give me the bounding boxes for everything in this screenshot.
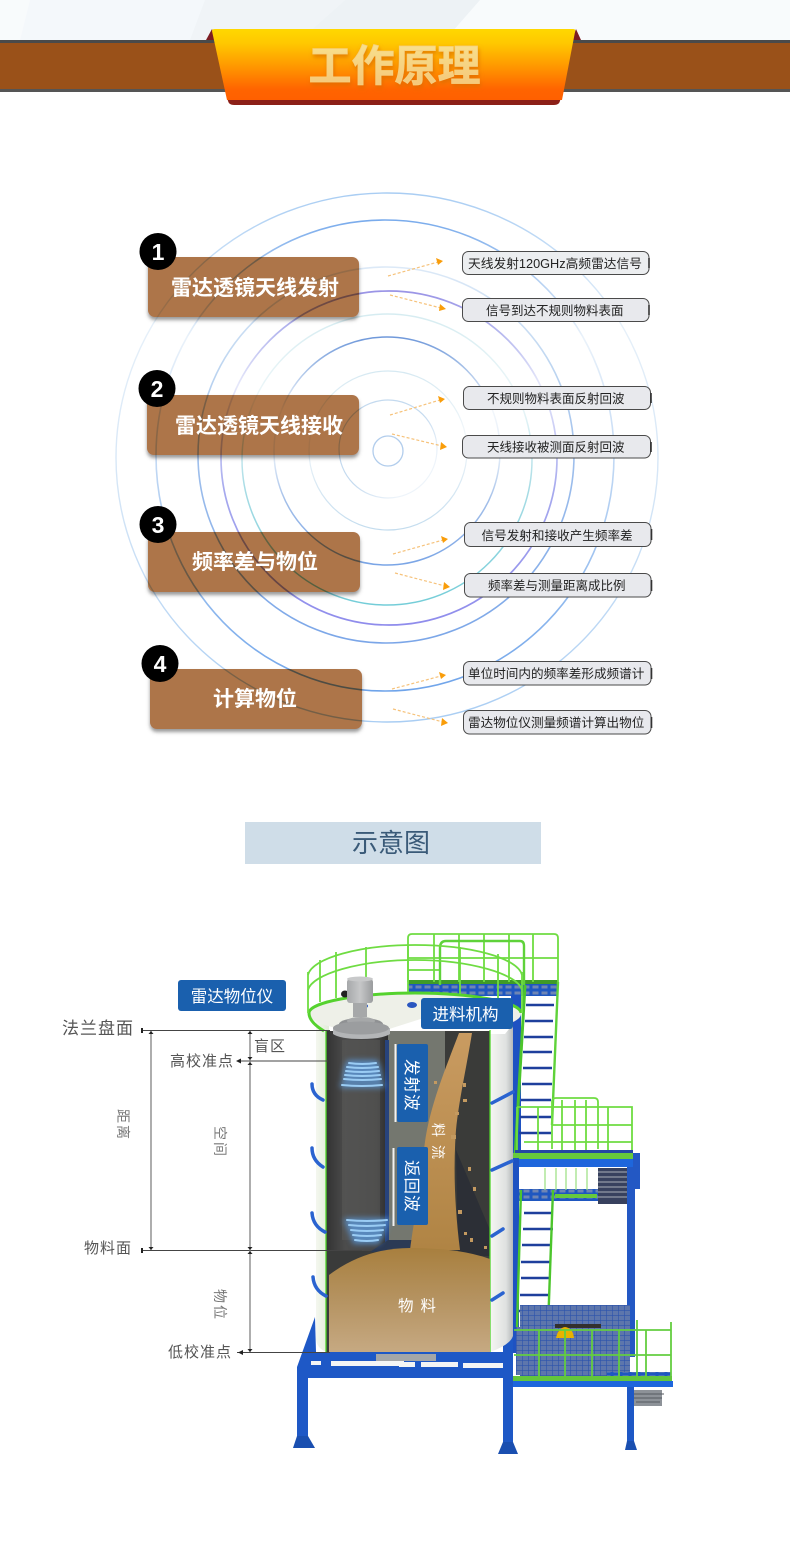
label: transmit wave — [394, 1044, 428, 1122]
label: feed mechanism — [421, 998, 513, 1029]
lower stair — [517, 1190, 553, 1327]
icon: radar level gauge — [333, 976, 390, 1039]
step 4: calculate level — [142, 645, 652, 734]
note 2b — [462, 436, 651, 458]
label: blind zone: 盲区 — [254, 1038, 286, 1055]
note 3a: 信号发射和接收产生频率差 — [482, 528, 633, 543]
middle platform — [513, 1098, 640, 1357]
note 1b — [462, 298, 649, 322]
title badge — [206, 29, 581, 105]
label: distance: 距离 — [115, 1109, 131, 1141]
note 2a — [464, 386, 651, 410]
material pile — [329, 1248, 490, 1352]
support legs — [293, 1140, 637, 1454]
note 3b: 频率差与测量距离成比例 — [488, 578, 626, 593]
arrow 2a — [390, 396, 445, 415]
icon: return wave bottom — [347, 1220, 387, 1241]
base slots — [311, 1361, 503, 1368]
tank cutaway interior — [326, 1030, 490, 1352]
arrow 3a — [393, 536, 448, 554]
number badge 2: 2 — [151, 376, 163, 402]
label: feed mechanism: 进料机构 — [432, 1005, 498, 1024]
silo steel structure — [293, 934, 673, 1454]
tank lid and ring rail — [308, 945, 522, 1035]
note 4b: 雷达物位仪测量频谱计算出物位 — [468, 716, 645, 730]
label: material flow: 料流 — [430, 1123, 446, 1167]
number badge 4: 4 — [154, 651, 167, 677]
schematic heading: 示意图 — [352, 828, 430, 858]
label: return wave: 返回波 — [402, 1160, 421, 1212]
note 3a — [464, 522, 652, 546]
step 4 heading: 计算物位 — [213, 687, 297, 711]
note 2a: 不规则物料表面反射回波 — [487, 391, 625, 406]
note 1a: 天线发射120GHz高频雷达信号 — [468, 256, 642, 271]
step 1 heading: 雷达透镜天线发射 — [171, 277, 339, 300]
number badge 2 — [138, 370, 176, 407]
label: radar level gauge: 雷达物位仪 — [191, 987, 273, 1006]
label: radar level gauge — [178, 980, 286, 1011]
concentric radar rings — [116, 193, 658, 722]
dimension lines — [141, 1028, 362, 1355]
label: space: 空间 — [212, 1126, 228, 1158]
number badge 1 — [140, 233, 176, 270]
note 4a: 单位时间内的频率差形成频谱计 — [468, 666, 645, 681]
tank shell — [316, 1020, 513, 1352]
label: level: 物位 — [212, 1289, 228, 1321]
arrow 2b — [392, 434, 447, 450]
label: material surface: 物料面 — [84, 1240, 132, 1257]
lower platform — [513, 1305, 673, 1406]
arrow 3b — [395, 573, 450, 590]
note 3b — [464, 574, 652, 597]
note 2b: 天线接收被测面反射回波 — [487, 440, 625, 454]
upper stair — [515, 982, 558, 1158]
label: high calibration point: 高校准点 — [170, 1053, 234, 1070]
number badge 3 — [140, 506, 176, 543]
number badge 1: 1 — [152, 239, 165, 265]
arrow 4b — [393, 709, 448, 726]
label: flange face: 法兰盘面 — [62, 1019, 134, 1038]
header band — [0, 0, 790, 92]
icon: transmit wave top — [342, 1063, 382, 1086]
arrow 1a — [388, 258, 443, 276]
material flow stream — [410, 1033, 487, 1250]
note 4a — [464, 662, 652, 685]
note 4b — [464, 710, 652, 734]
arrow 4a — [392, 672, 446, 689]
step 2: antenna receive — [138, 370, 651, 458]
label: return wave — [392, 1147, 428, 1226]
title text: 工作原理 — [308, 43, 480, 91]
schematic heading — [245, 822, 541, 864]
icon: yellow alarm — [556, 1327, 574, 1338]
number badge 4 — [142, 645, 178, 682]
label: low calibration point: 低校准点 — [168, 1344, 232, 1361]
label: material: 物料 — [398, 1297, 443, 1315]
upper platform — [408, 934, 558, 1160]
note 1a — [462, 252, 649, 274]
step 3 heading: 频率差与物位 — [192, 550, 318, 574]
number badge 3: 3 — [152, 512, 164, 538]
step 3: frequency difference — [140, 506, 652, 597]
step 1: antenna transmit — [140, 233, 649, 322]
tank wall clips — [312, 1084, 513, 1300]
step 2 heading: 雷达透镜天线接收 — [175, 415, 343, 438]
note 1b: 信号到达不规则物料表面 — [486, 303, 624, 318]
label: transmit wave: 发射波 — [402, 1059, 421, 1112]
step label plates — [147, 257, 362, 729]
arrow 1b — [390, 295, 446, 311]
silo body — [308, 945, 522, 1352]
